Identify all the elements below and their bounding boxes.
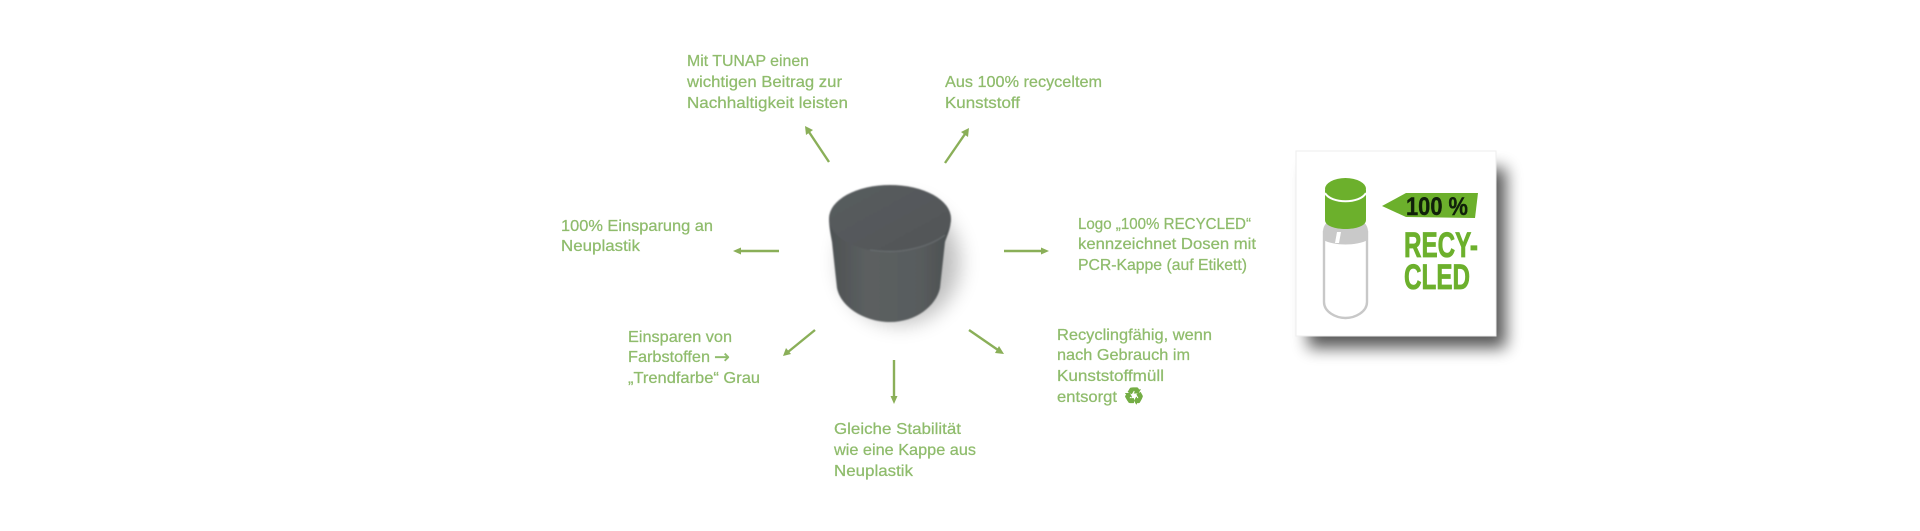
text: saving dyes: Einsparen von bbox=[628, 329, 732, 346]
text: same stability: Neuplastik bbox=[834, 463, 914, 480]
text: recyclable after use: nach Gebrauch im bbox=[1057, 347, 1190, 364]
arrow: down bbox=[890, 360, 898, 404]
text: recyclable after use: entsorgt bbox=[1057, 389, 1118, 406]
panel: 100% recycled logo bbox=[1296, 151, 1506, 348]
text: contribution to sustainability: Nachhaltigkeit leisten bbox=[687, 95, 848, 112]
text: made from recycled plastic: Aus 100% recyceltem bbox=[945, 74, 1102, 91]
text: logo marks cans: Logo „100% RECYCLED“ bbox=[1078, 216, 1251, 233]
text: contribution to sustainability: wichtigen Beitrag zur bbox=[686, 74, 843, 91]
arrow: left bbox=[733, 248, 779, 254]
text: contribution to sustainability: Mit TUNAP einen bbox=[687, 53, 809, 70]
badge: 100 %: 100 % bbox=[1406, 193, 1468, 221]
text: saving new plastic: 100% Einsparung an bbox=[561, 218, 713, 235]
arrow: up-left bbox=[805, 126, 829, 162]
text: saving dyes bbox=[628, 329, 760, 387]
arrow: down-right bbox=[969, 330, 1004, 354]
text: saving new plastic bbox=[561, 218, 713, 255]
text: recyclable after use bbox=[1057, 327, 1212, 406]
text: made from recycled plastic: Kunststoff bbox=[945, 95, 1021, 112]
text: logo marks cans bbox=[1078, 216, 1257, 274]
arrow: right bbox=[1004, 248, 1049, 254]
product photo: grey recycled cap bbox=[829, 185, 960, 324]
text: logo marks cans: PCR-Kappe (auf Etikett) bbox=[1078, 257, 1247, 274]
text: logo marks cans: kennzeichnet Dosen mit bbox=[1078, 236, 1257, 253]
wordmark: RECY-CLED: CLED bbox=[1404, 258, 1470, 297]
icon: bottle with green cap bbox=[1323, 178, 1368, 318]
text: same stability bbox=[833, 421, 976, 480]
text: same stability: wie eine Kappe aus bbox=[833, 442, 976, 459]
text: saving dyes: „Trendfarbe“ Grau bbox=[628, 370, 760, 387]
wordmark: RECY-CLED bbox=[1404, 226, 1478, 297]
text: contribution to sustainability bbox=[686, 53, 848, 112]
text: same stability: Gleiche Stabilität bbox=[834, 421, 962, 438]
text: saving dyes: Farbstoffen bbox=[628, 349, 710, 366]
arrow: up-right bbox=[945, 128, 969, 163]
text: recyclable after use: Recyclingfähig, wenn bbox=[1057, 327, 1212, 344]
wordmark: RECY-CLED: RECY- bbox=[1404, 226, 1478, 265]
icon: recycling symbol: ♻ bbox=[1124, 384, 1144, 410]
text: recyclable after use: Kunststoffmüll bbox=[1057, 368, 1164, 385]
text: saving new plastic: Neuplastik bbox=[561, 238, 641, 255]
text: made from recycled plastic bbox=[945, 74, 1102, 112]
arrow: down-left bbox=[783, 330, 815, 356]
text: saving dyes: → bbox=[714, 346, 730, 368]
